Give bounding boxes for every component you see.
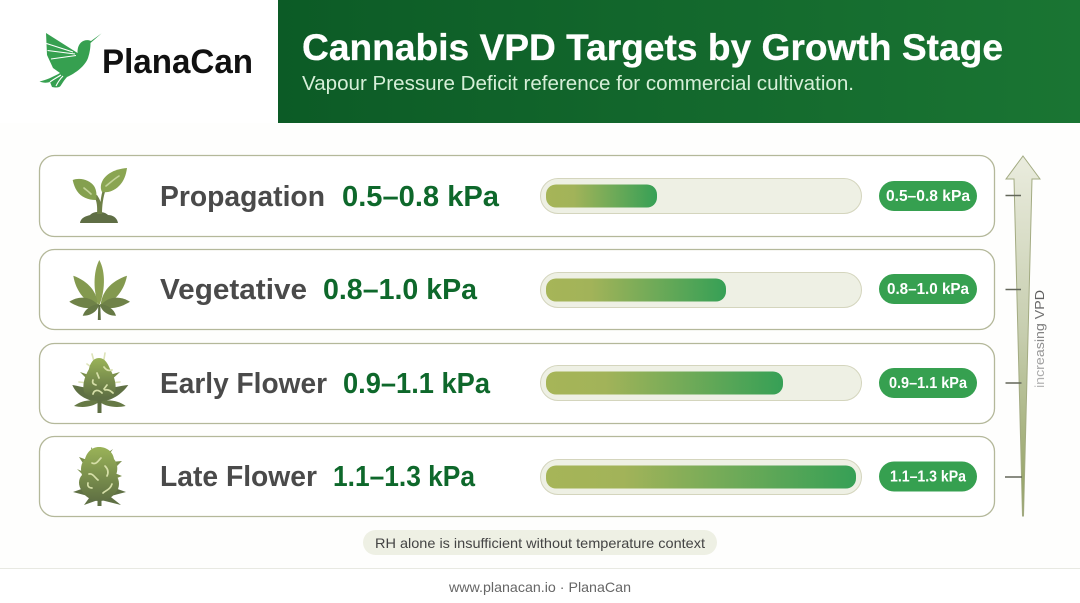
panel: late flower — [40, 436, 994, 516]
arrow: increasing VPD scale — [1005, 156, 1047, 516]
icon: early flower bud — [72, 353, 128, 413]
range pill — [879, 181, 977, 211]
footer — [0, 568, 1080, 603]
VPD range: 0.9–1.1 kPa — [343, 368, 491, 400]
range bar — [540, 178, 862, 214]
range pill — [879, 368, 977, 398]
footer: www.planacan.io · PlanaCan — [448, 579, 631, 595]
range bar — [540, 460, 862, 494]
range bar — [540, 272, 862, 308]
panel: vegetative — [40, 250, 994, 330]
logo panel — [0, 0, 278, 123]
logo wordmark: PlanaCan — [102, 43, 253, 81]
range pill — [879, 274, 977, 304]
icon: seedling — [73, 168, 127, 223]
range pill — [879, 462, 977, 492]
range pill: 0.8–1.0 kPa — [887, 281, 969, 298]
callout: note — [363, 530, 717, 555]
icon: hummingbird — [40, 33, 102, 88]
axis label: increasing VPD — [1032, 290, 1047, 388]
stage name: Late Flower — [160, 461, 317, 493]
header banner — [278, 0, 1080, 123]
callout: note: RH alone is insufficient without temperature context — [375, 535, 705, 551]
VPD range: 0.8–1.0 kPa — [323, 274, 478, 306]
panel: early flower — [40, 344, 994, 424]
stage name: Vegetative — [160, 274, 307, 306]
stage name: Early Flower — [160, 368, 327, 400]
range bar — [540, 366, 862, 400]
stage name: Propagation — [160, 181, 325, 213]
range pill: 1.1–1.3 kPa — [890, 468, 966, 486]
title: Cannabis VPD Targets by Growth Stage — [302, 26, 1003, 68]
range pill: 0.9–1.1 kPa — [889, 375, 967, 392]
subtitle: Vapour Pressure Deficit reference for commercial cultivation. — [302, 72, 854, 95]
icon: cannabis leaf — [69, 260, 130, 320]
panel: propagation — [40, 156, 994, 236]
VPD range: 0.5–0.8 kPa — [342, 181, 500, 213]
VPD range: 1.1–1.3 kPa — [333, 461, 476, 493]
icon: late flower bud — [73, 447, 126, 506]
range pill: 0.5–0.8 kPa — [886, 188, 970, 205]
